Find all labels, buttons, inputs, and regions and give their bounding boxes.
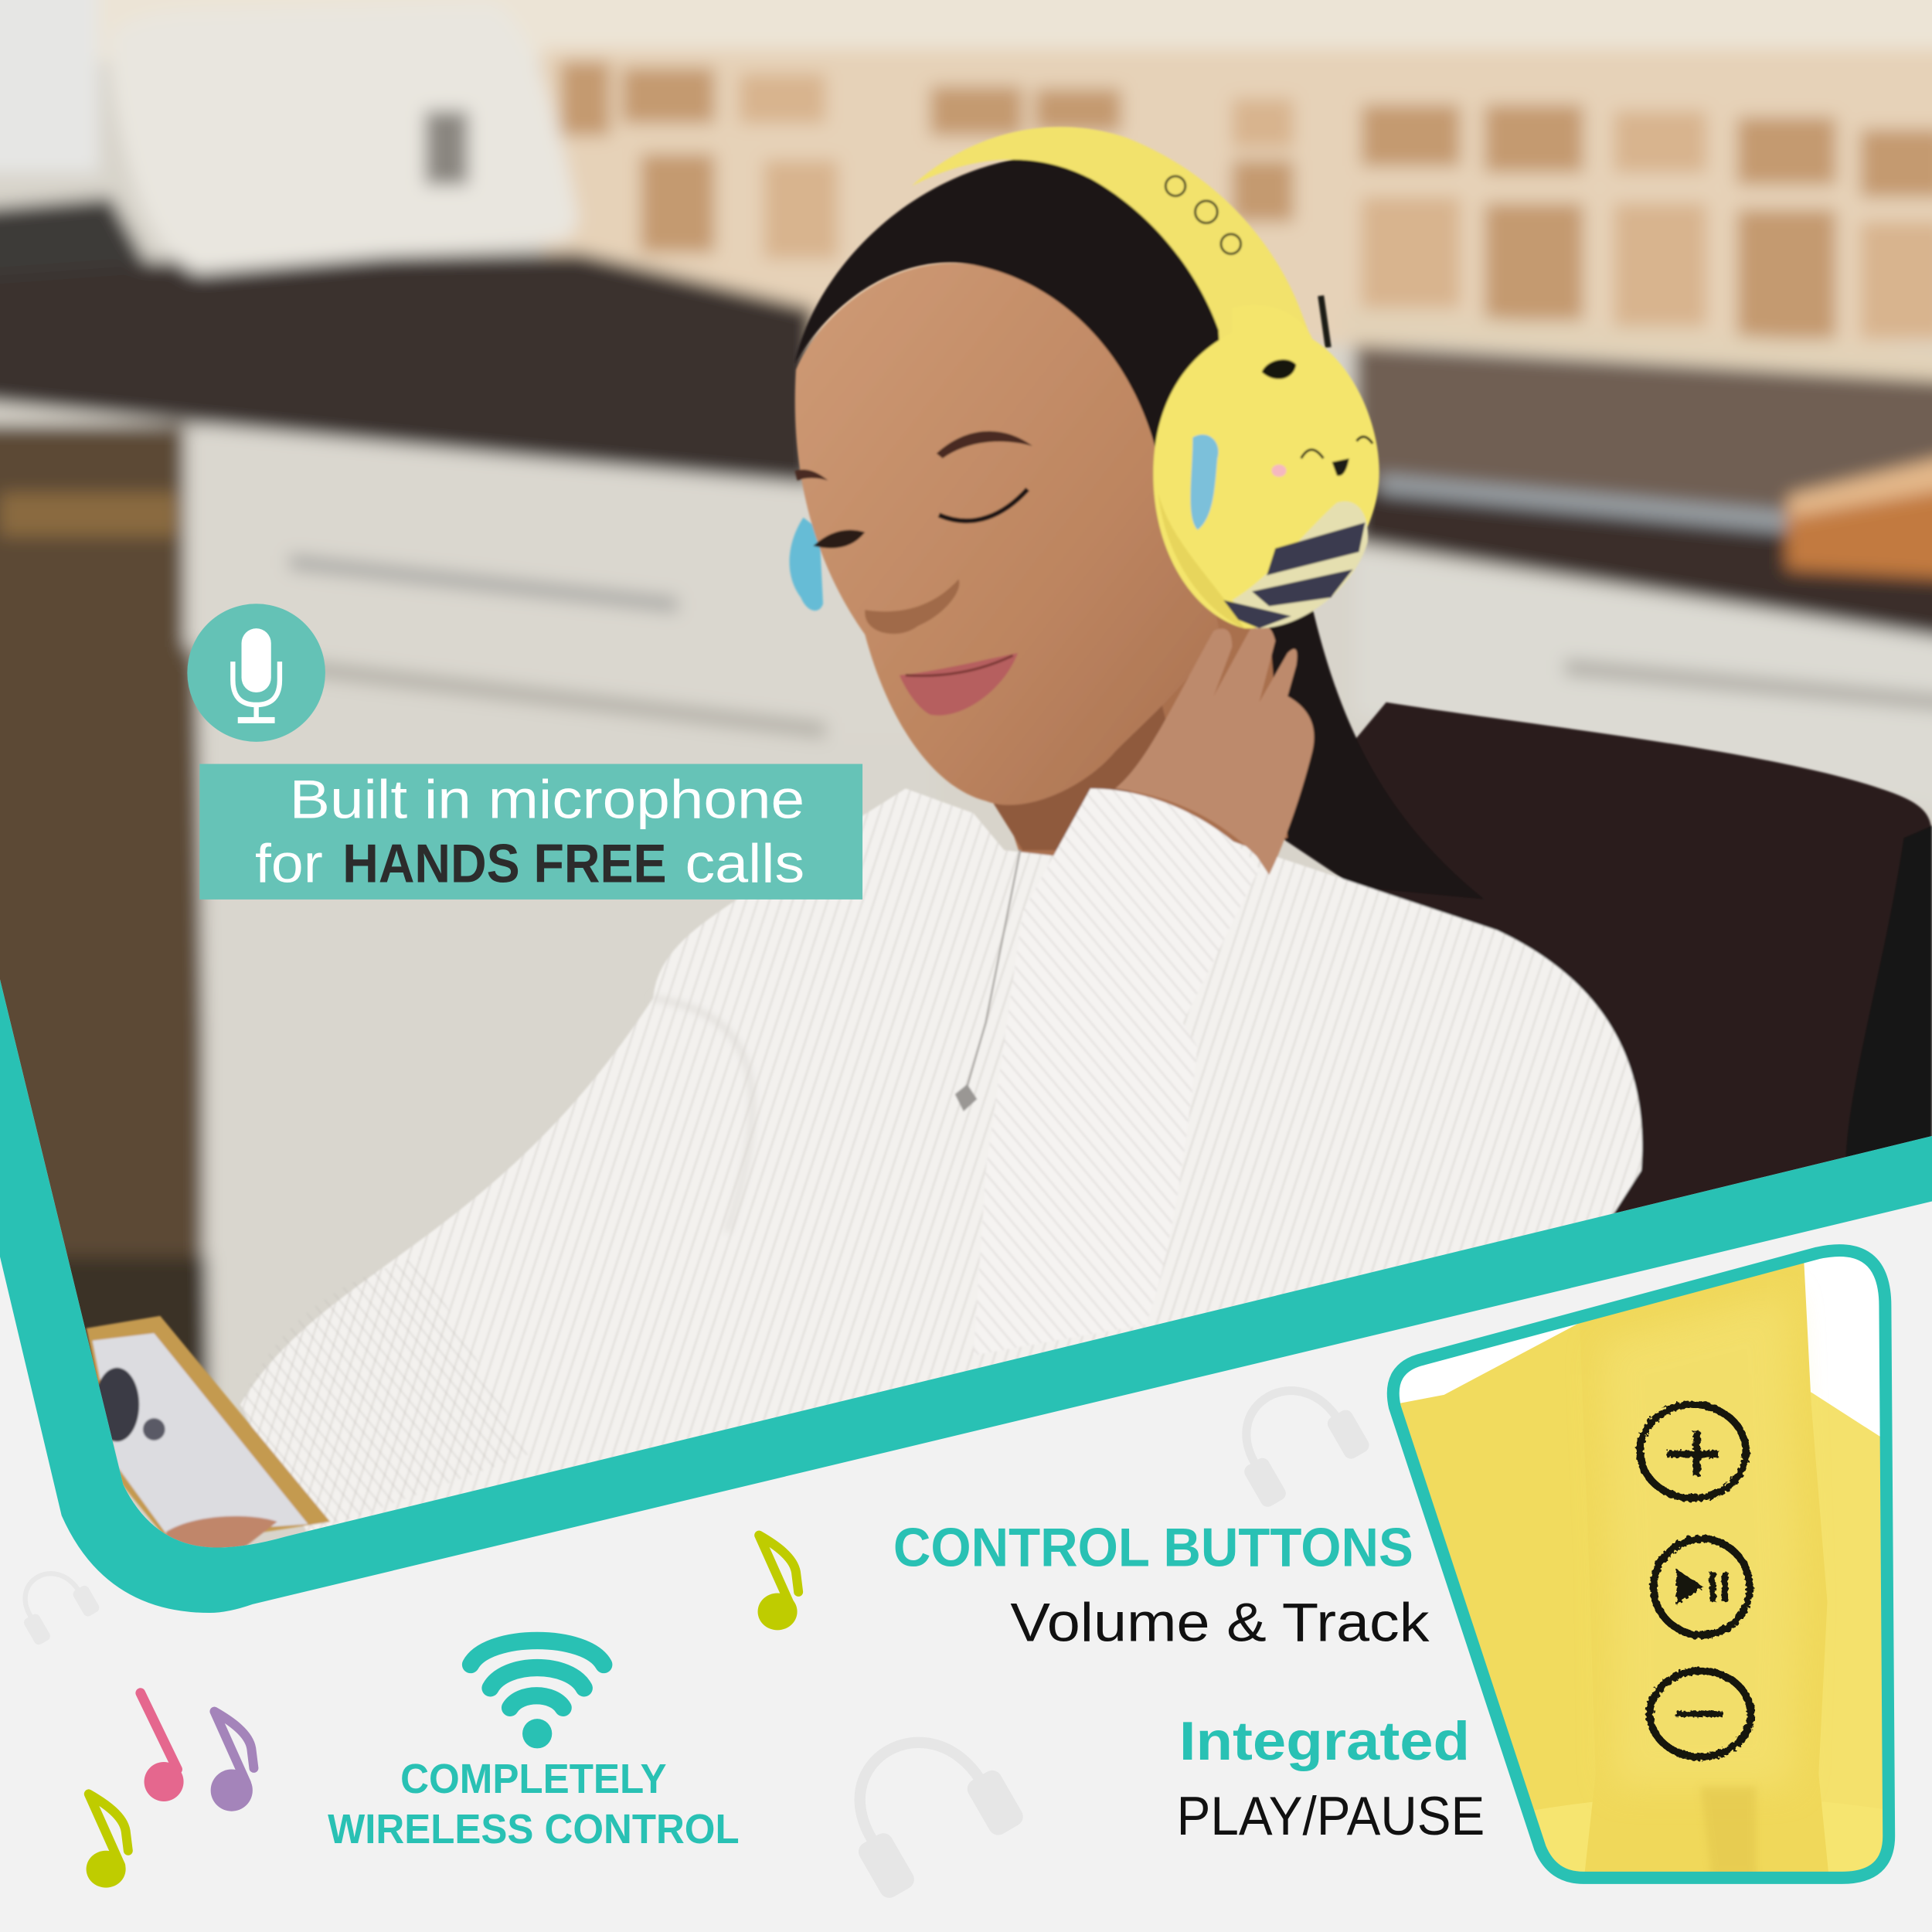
- bee wing: [1191, 434, 1219, 530]
- blue wing behind face: [790, 518, 823, 611]
- icon: purple music note: [211, 1712, 253, 1811]
- icon: wifi: [471, 1641, 604, 1748]
- watermark headphone: left: [7, 1558, 101, 1646]
- plush body: [1393, 1321, 1627, 1885]
- counter: [0, 253, 813, 487]
- text: control buttons: CONTROL BUTTONS: [893, 1516, 1413, 1577]
- hand at neck: [1115, 624, 1314, 875]
- necklace: [964, 850, 1020, 1099]
- phone: [87, 1316, 330, 1565]
- text: completely wireless control: WIRELESS CONTROL: [328, 1807, 740, 1852]
- plus button: [1640, 1405, 1746, 1498]
- face: [795, 264, 1219, 805]
- holding hand: [166, 1516, 277, 1565]
- headband: [912, 127, 1318, 357]
- text: integrated play pause: [1177, 1710, 1485, 1846]
- cabinets: [0, 425, 203, 1263]
- icon: green music note left: [87, 1794, 128, 1888]
- plush stem: [1580, 1259, 1830, 1885]
- woman figure: [87, 127, 1932, 1565]
- sweater: [240, 788, 1642, 1534]
- play button: [1654, 1539, 1750, 1635]
- toaster: [111, 2, 579, 274]
- inset photo: control buttons on headband: [1380, 1232, 1897, 1885]
- bee stripes: [1232, 502, 1368, 628]
- icon: green music note right: [758, 1536, 798, 1630]
- callout: hands free text panel: Built in microphone: [290, 769, 804, 830]
- minus button: [1650, 1671, 1751, 1757]
- text: completely wireless control: [328, 1757, 740, 1852]
- watermark headphone: centre: [1217, 1365, 1372, 1509]
- text: integrated play pause: PLAY/PAUSE: [1177, 1785, 1485, 1846]
- neck: [1013, 615, 1289, 856]
- teal frame band: [0, 980, 1932, 1613]
- callout: hands free text panel: for: [255, 833, 323, 894]
- text: control buttons: [893, 1516, 1430, 1653]
- text: control buttons: Volume & Track: [1010, 1592, 1430, 1653]
- watermark headphone: bottom: [821, 1708, 1026, 1902]
- facial features: [794, 431, 1032, 716]
- callout: microphone icon: [187, 604, 325, 742]
- text: integrated play pause: Integrated: [1179, 1710, 1470, 1771]
- chair: [1306, 702, 1932, 1219]
- icon: pink music note: [141, 1693, 184, 1801]
- callout: hands free text panel: calls: [685, 833, 804, 894]
- long hair: [794, 157, 1485, 900]
- wood board: [1787, 456, 1932, 579]
- bee ear cup: [1153, 296, 1379, 628]
- raised sleeve: [974, 788, 1259, 1355]
- bee face: [1262, 359, 1296, 379]
- callout: hands free text panel: [199, 764, 862, 900]
- callout: hands free text panel: HANDS FREE: [342, 833, 667, 894]
- text: completely wireless control: COMPLETELY: [400, 1757, 667, 1802]
